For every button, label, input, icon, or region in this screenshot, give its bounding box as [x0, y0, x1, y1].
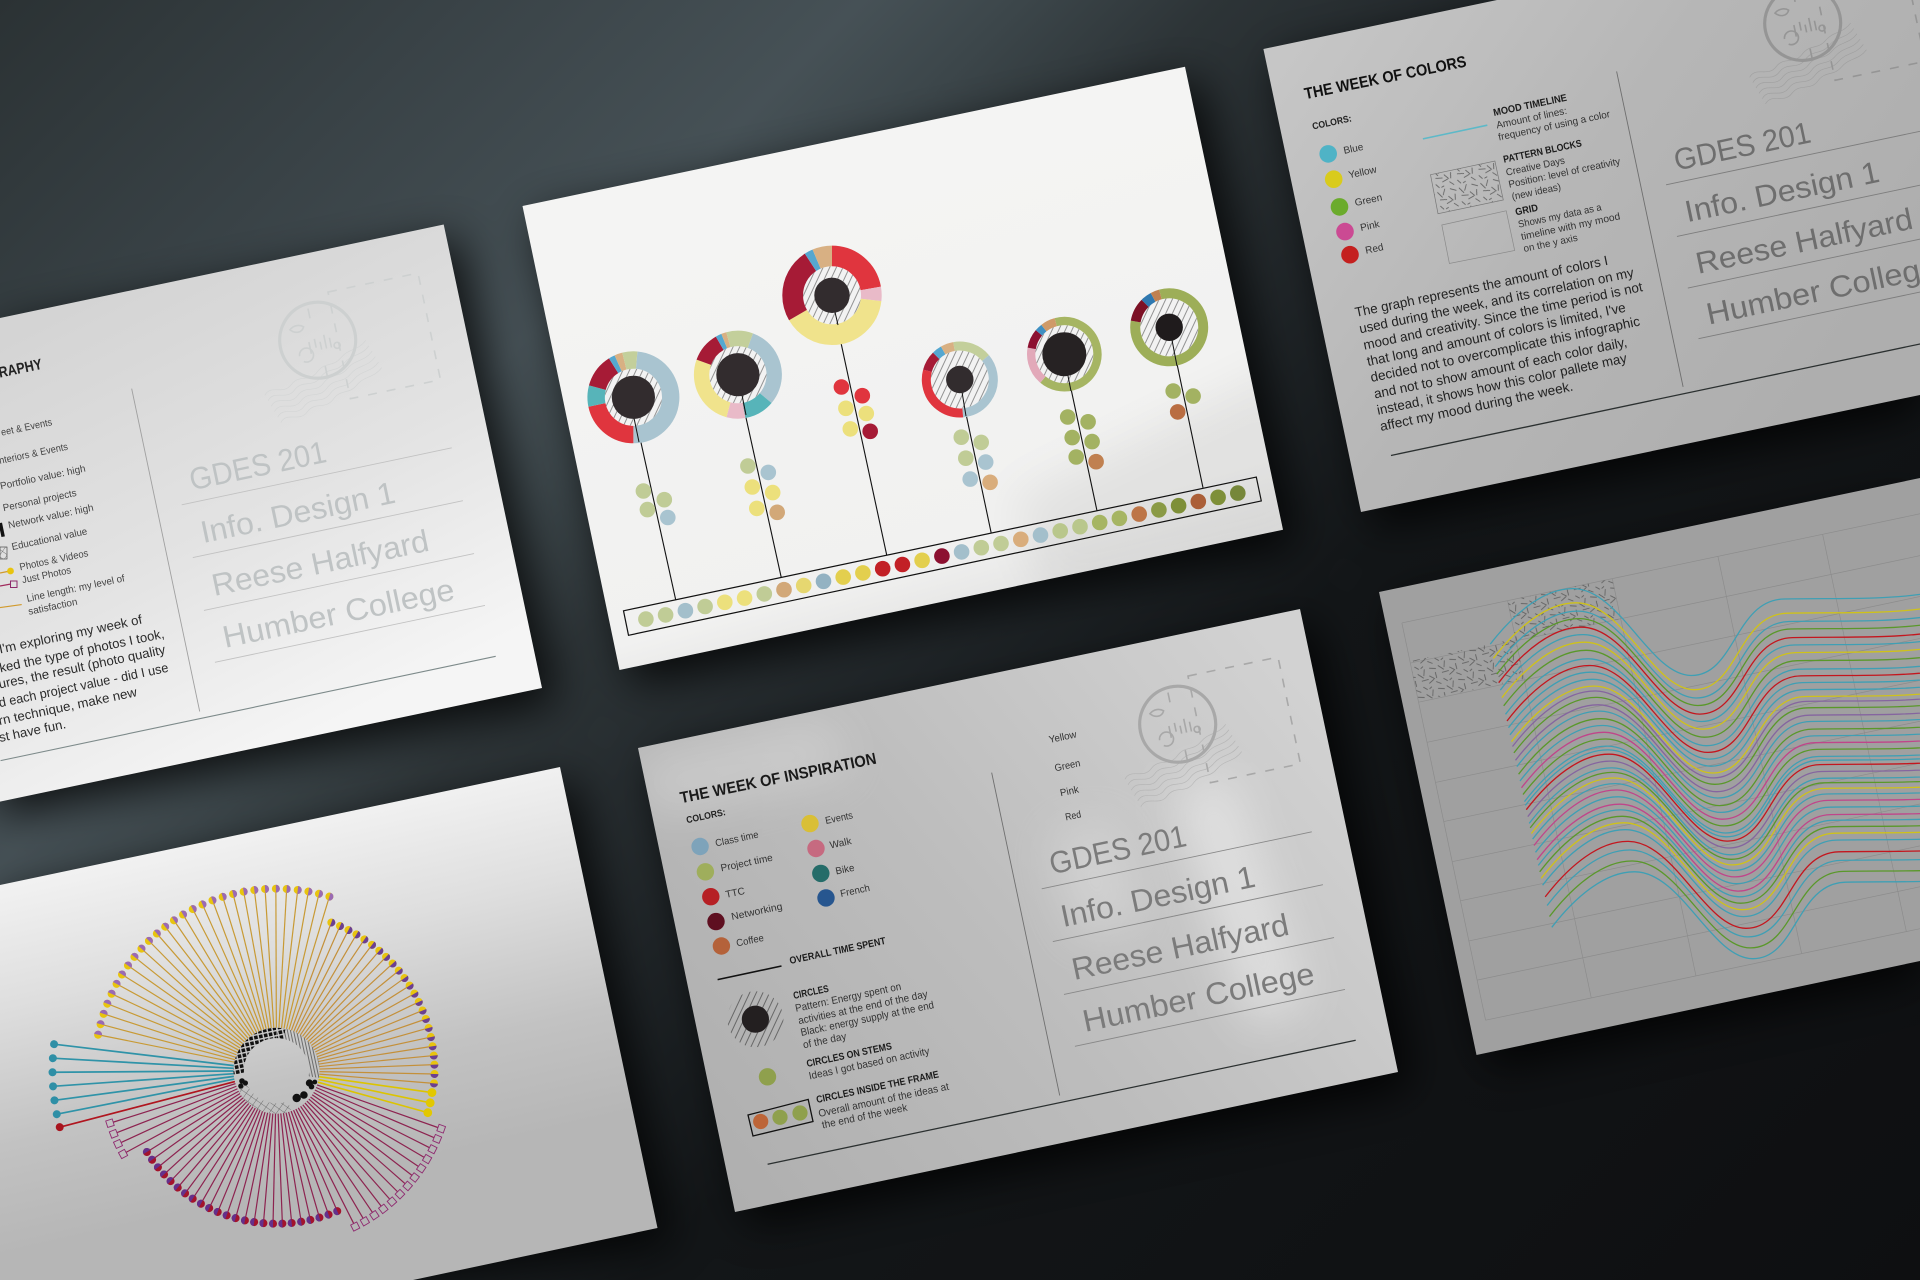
flower 4	[921, 341, 999, 418]
circles on stems key	[759, 1041, 931, 1086]
card paper	[1379, 478, 1920, 1055]
circles key: Black: energy supply at the end	[800, 999, 935, 1039]
mood timeline key	[1423, 93, 1612, 143]
flower 2	[691, 328, 784, 421]
mood timeline key: Amount of lines:	[1495, 106, 1568, 131]
card paper	[1263, 0, 1920, 512]
description paragraph: decided not to overcomplicate this infographic	[1369, 314, 1641, 385]
description paragraph: used during the week, and its correlation on my	[1358, 265, 1635, 336]
intro paragraph	[0, 612, 170, 745]
circles on stems key: Ideas I got based on activity	[808, 1045, 931, 1082]
address text: Reese Halfyard	[1693, 202, 1916, 281]
address side and stamp	[0, 273, 499, 761]
legend icons	[0, 523, 22, 608]
intro paragraph: I'm exploring my week of	[0, 612, 144, 656]
stamp and postmark	[247, 273, 442, 425]
grid key: timeline with my mood	[1520, 211, 1621, 243]
address lines	[182, 448, 485, 662]
pattern blocks key: PATTERN BLOCKS	[1502, 138, 1583, 166]
mood timeline colored lines	[1490, 589, 1920, 959]
address text: GDES 201	[1046, 818, 1189, 881]
circles inside the frame key	[748, 1069, 950, 1136]
colors legend: COLORS:	[1311, 113, 1353, 132]
window light streaks	[630, 720, 1310, 1030]
colors legend: Yellow	[1048, 729, 1078, 746]
long red spoke	[55, 1078, 236, 1132]
mood timeline key: frequency of using a color	[1497, 109, 1612, 143]
black energy blobs	[238, 1078, 317, 1102]
background grid	[1402, 511, 1920, 1020]
colors legend: Bike	[835, 863, 856, 877]
colors legend: TTC	[725, 886, 746, 901]
circles key: CIRCLES	[792, 984, 830, 1002]
colors legend: Pink	[1059, 784, 1081, 799]
square-tipped spokes, left	[106, 1080, 240, 1159]
legend text: Portfolio value: high	[0, 464, 87, 492]
colors legend: COLORS:	[685, 807, 727, 826]
long teal spokes	[48, 1040, 235, 1119]
address text: Reese Halfyard	[1068, 907, 1292, 987]
crimson and purple spokes	[141, 1090, 343, 1228]
address text: Info. Design 1	[197, 475, 398, 550]
address text: Humber College	[219, 572, 458, 655]
flower 6	[1128, 286, 1211, 369]
card paper	[638, 609, 1398, 1212]
colors legend: Coffee	[735, 933, 765, 949]
colors legend	[685, 729, 1082, 955]
colors legend: Green	[1054, 758, 1081, 774]
frame of overall ideas	[624, 477, 1261, 635]
overall time spent key	[718, 936, 887, 980]
card paper	[0, 767, 658, 1280]
colors legend: French	[839, 883, 871, 900]
colors legend: Events	[824, 810, 854, 827]
legend text: satisfaction	[27, 597, 79, 618]
colors legend: Pink	[1359, 219, 1382, 234]
heading: THE WEEK OF INSPIRATION	[679, 751, 878, 807]
circles inside the frame key: the end of the week	[821, 1102, 909, 1131]
overall time spent key: OVERALL TIME SPENT	[789, 936, 887, 967]
soft shadow patch on paper	[1028, 388, 1282, 578]
pattern blocks key: Position: level of creativity	[1508, 156, 1621, 191]
colors legend: Green	[1354, 192, 1383, 209]
intro paragraph: d each project value - did I use	[0, 660, 170, 710]
stems	[636, 315, 1203, 600]
colors legend	[1311, 113, 1385, 263]
card paper	[0, 224, 542, 802]
circles key: of the day	[802, 1030, 848, 1051]
bottom rule	[1391, 326, 1920, 455]
square-tipped spokes, right	[293, 1082, 446, 1231]
description paragraph: affect my mood during the week.	[1379, 379, 1574, 434]
address text	[1671, 96, 1920, 331]
patterned inner ring	[239, 1033, 314, 1108]
colors legend: Networking	[730, 901, 784, 923]
vertical divider	[1617, 71, 1683, 387]
address text	[1046, 798, 1318, 1039]
description paragraph: that long and amount of colors is limited, I've	[1366, 300, 1627, 369]
circles inside the frame key: CIRCLES INSIDE THE FRAME	[815, 1069, 940, 1106]
circles key: Pattern: Energy spent on	[794, 981, 902, 1015]
intro paragraph: ked the type of photos I took,	[0, 626, 166, 675]
address lines	[1666, 128, 1920, 339]
bottom rule	[1, 656, 496, 761]
description paragraph: and not to show amount of each color daily,	[1373, 334, 1628, 401]
legend text: Line length: my level of	[26, 573, 126, 605]
address text: Info. Design 1	[1682, 155, 1882, 229]
mood timeline key: MOOD TIMELINE	[1492, 93, 1568, 119]
photos and videos spokes, outer arc	[93, 885, 334, 1066]
pattern blocks key: Creative Days	[1505, 155, 1566, 179]
intro paragraph: rn technique, make new	[0, 684, 139, 728]
circles key: activities at the end of the day	[797, 988, 929, 1027]
pattern blocks key	[1430, 138, 1621, 214]
description paragraph: The graph represents the amount of colors I	[1354, 253, 1609, 320]
vertical divider	[132, 389, 200, 712]
card paper	[522, 67, 1283, 670]
panel: postcard back, the week of inspiration (bottom centre)	[630, 609, 1398, 1212]
pattern blocks key: (new ideas)	[1511, 182, 1562, 203]
grid key	[1442, 202, 1621, 264]
photos and videos spokes, inner arc	[288, 917, 439, 1088]
stem ideas dots	[636, 379, 1201, 525]
radial chart	[48, 885, 446, 1231]
stamp and postmark	[1732, 0, 1920, 106]
circles inside the frame key: Overall amount of the ideas at	[817, 1081, 950, 1120]
address text: Info. Design 1	[1057, 859, 1258, 934]
legend text: eet & Events	[0, 417, 53, 439]
stamp and postmark	[1107, 657, 1302, 809]
address text: Reese Halfyard	[208, 523, 432, 603]
address text: GDES 201	[186, 434, 329, 497]
address text: Humber College	[1079, 956, 1318, 1039]
legend text: Network value: high	[7, 503, 95, 531]
colors legend: Yellow	[1348, 164, 1379, 181]
circles on stems key: CIRCLES ON STEMS	[806, 1041, 893, 1070]
panel: postcard back, the week of colors (top right)	[1263, 0, 1920, 512]
flower 5	[1024, 314, 1105, 395]
address text	[186, 414, 458, 655]
colors legend: Red	[1364, 242, 1385, 257]
flower 1	[593, 357, 674, 442]
legend text	[0, 417, 126, 618]
colors legend: Walk	[829, 836, 854, 851]
heading: THE WEEK OF COLORS	[1303, 54, 1468, 103]
colors legend: Red	[1064, 809, 1082, 823]
panel: radial chart postcard (bottom left)	[0, 767, 658, 1280]
bottom rule	[768, 1040, 1356, 1164]
colors legend: Class time	[714, 830, 760, 849]
address text: GDES 201	[1671, 116, 1814, 177]
colors legend: Blue	[1343, 142, 1365, 157]
address side and stamp	[1312, 0, 1920, 455]
legend text: Just Photos	[21, 565, 72, 586]
legend text: Educational value	[11, 526, 89, 553]
legend text: nteriors & Events	[0, 442, 69, 467]
circles key	[727, 981, 935, 1051]
legend text: Personal projects	[2, 488, 78, 514]
colors legend: Project time	[720, 853, 774, 874]
grid key: on the y axis	[1523, 233, 1579, 255]
flower 3	[793, 256, 871, 335]
creative day pattern blocks	[1402, 579, 1629, 701]
panel: postcard back, photography (left top)	[0, 224, 542, 802]
address lines	[1042, 832, 1345, 1046]
description paragraph: instead, it shows how this color pallete may	[1376, 350, 1628, 418]
solid yellow spokes	[317, 1072, 437, 1118]
address side and stamp	[687, 657, 1359, 1164]
vertical divider	[992, 773, 1060, 1096]
legend text: Photos & Videos	[19, 548, 89, 573]
intro paragraph: ures, the result (photo quality	[0, 642, 167, 691]
panel: mood timeline wave chart postcard (bottom right)	[1379, 478, 1920, 1055]
grid key: Shows my data as a	[1517, 202, 1603, 231]
description paragraph: mood and creativity. Since the time period is not	[1362, 279, 1644, 353]
description paragraph	[1354, 253, 1644, 434]
grid key: GRID	[1514, 203, 1539, 218]
panel: flower chart postcard (top centre)	[522, 67, 1320, 670]
